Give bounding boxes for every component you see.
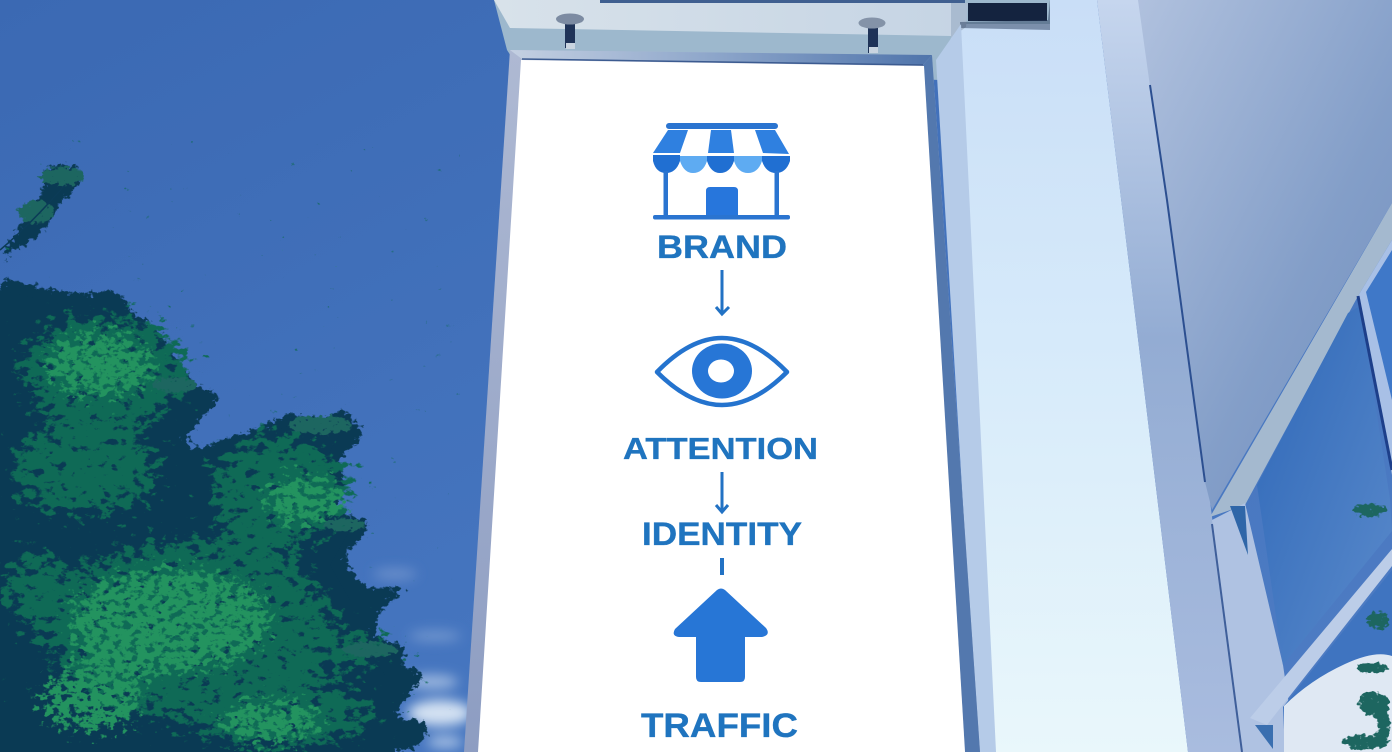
icon: eye bbox=[657, 338, 787, 405]
jamb seam line bbox=[1212, 524, 1242, 752]
upper window sill bbox=[1210, 203, 1392, 517]
wall strip bbox=[1097, 0, 1242, 752]
panel: sign frame bbox=[464, 50, 980, 752]
arrow: attention to identity bbox=[716, 472, 728, 512]
right mounting bolt bbox=[858, 18, 886, 53]
top edge line bbox=[600, 0, 965, 3]
heading: identity: IDENTITY bbox=[642, 516, 802, 552]
icon: storefront bbox=[653, 123, 790, 220]
tree bbox=[0, 163, 430, 752]
right window frame bbox=[1358, 240, 1392, 475]
soffit canopy bbox=[494, 0, 1050, 80]
tree mid green clusters bbox=[0, 310, 400, 752]
panel: white sign face bbox=[478, 60, 965, 752]
cloud reflection bbox=[1284, 654, 1392, 752]
left mounting bolt bbox=[556, 14, 584, 49]
frame gap strip bbox=[936, 24, 996, 752]
tree frayed outer foliage bbox=[0, 163, 430, 752]
upper wall panel bbox=[1138, 0, 1392, 510]
side trim bbox=[951, 3, 968, 38]
lower glass bbox=[1283, 570, 1392, 752]
dash connector bbox=[720, 558, 724, 575]
icon: up arrow bbox=[674, 588, 768, 682]
heading: brand: BRAND bbox=[657, 229, 787, 265]
window glass upper bbox=[1257, 306, 1392, 665]
tree edge sprigs bbox=[16, 165, 400, 659]
clouds bbox=[373, 569, 472, 748]
heading: attention: ATTENTION bbox=[623, 431, 818, 466]
lower window sill bbox=[1250, 549, 1392, 725]
reflected leaves bbox=[1339, 502, 1392, 751]
dark fascia box bbox=[968, 3, 1047, 21]
far glass bbox=[1366, 250, 1392, 400]
panel seam line bbox=[1150, 85, 1205, 482]
tree bright green clusters bbox=[30, 325, 355, 752]
dark corner triangle bbox=[1230, 506, 1248, 555]
arrow: brand to attention bbox=[716, 270, 729, 314]
window jamb bbox=[1212, 503, 1296, 752]
fascia lower shadow bbox=[960, 0, 1050, 30]
canopy top band bbox=[494, 0, 965, 36]
window frame dark line bbox=[1358, 296, 1392, 470]
lower corner shadow bbox=[1255, 725, 1273, 749]
heading: traffic: TRAFFIC bbox=[641, 707, 798, 745]
tree top sprig branch bbox=[0, 185, 65, 250]
building wall: pale pillar bbox=[945, 0, 1188, 752]
tree solid dark core bbox=[0, 290, 395, 752]
